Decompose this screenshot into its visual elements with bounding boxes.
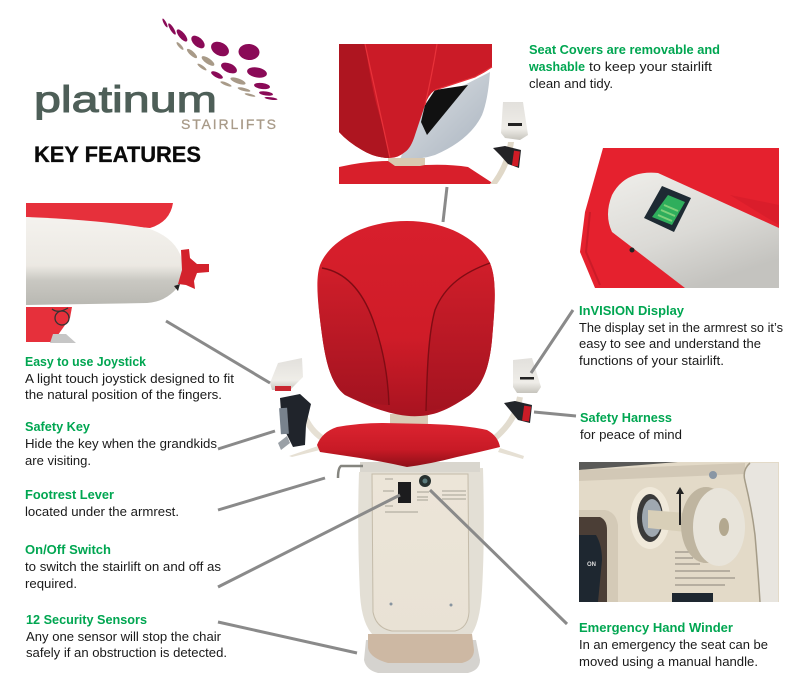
left armrest	[270, 358, 322, 457]
text: safety harness: for peace of mind	[580, 427, 682, 442]
right armrest	[495, 358, 541, 459]
text: on/off switch: to switch the stairlift on and off as	[25, 559, 221, 574]
text: footrest lever: located under the armrest.	[25, 504, 179, 519]
text: InVISION display: InVISION Display	[579, 303, 685, 318]
text: InVISION display: easy to see and understand the	[579, 336, 761, 351]
text: on/off switch: required.	[25, 576, 77, 591]
text: InVISION display: The display set in the armrest so it’s	[579, 320, 783, 335]
hand winder socket	[419, 475, 431, 487]
logo: Platinum Stairlifts	[34, 18, 278, 132]
text: joystick: the natural position of the fingers.	[25, 387, 222, 402]
text: seat covers	[528, 42, 720, 91]
logo subtitle: STAIRLIFTS	[181, 116, 276, 132]
text: safety key: Safety Key	[25, 419, 91, 434]
key ring	[52, 308, 69, 325]
text: safety harness: Safety Harness	[580, 410, 672, 425]
pointer: seat covers	[443, 187, 447, 222]
pointer: security sensors	[218, 622, 357, 653]
pointer: display	[531, 310, 573, 373]
title: KEY FEATURES	[34, 142, 201, 167]
pointer: hand winder	[430, 490, 567, 624]
logo wordmark: platinum	[34, 79, 217, 120]
text: emergency hand winder: In an emergency the seat can be	[579, 637, 768, 652]
text: safety key: are visiting.	[25, 453, 91, 468]
photo: emergency hand winder: ON	[587, 562, 596, 568]
pointer: harness	[534, 412, 576, 416]
text: joystick: A light touch joystick designed to fit	[25, 371, 234, 386]
text: security sensors: safely if an obstruction is detected.	[26, 645, 227, 660]
text: seat covers: clean and tidy.	[529, 76, 613, 91]
on/off switch	[398, 482, 411, 503]
text: footrest lever	[25, 487, 179, 519]
text: emergency hand winder: moved using a manual handle.	[579, 654, 758, 669]
text: emergency hand winder	[579, 620, 768, 669]
text: InVISION display: functions of your stairlift.	[579, 353, 724, 368]
text: on/off switch: On/Off Switch	[25, 542, 111, 557]
photo: joystick	[26, 203, 209, 343]
footrest lever	[338, 466, 363, 478]
photo: InVISION display	[580, 148, 779, 288]
text: safety key	[25, 419, 217, 468]
logo dots	[162, 18, 278, 101]
pointer: joystick	[166, 321, 270, 383]
text: footrest lever: Footrest Lever	[25, 487, 114, 502]
harness and key	[280, 394, 311, 447]
text: emergency hand winder: Emergency Hand Winder	[579, 620, 733, 635]
text: seat covers: Seat Covers are removable and	[529, 42, 720, 57]
pointer lines	[166, 187, 576, 653]
photo: seat covers	[339, 44, 528, 184]
pointer: safety key	[218, 431, 275, 449]
text: safety key: Hide the key when the grandkids	[25, 436, 217, 451]
seat cushion	[317, 423, 500, 467]
text: security sensors	[26, 612, 227, 660]
text: joystick: Easy to use Joystick	[25, 354, 147, 369]
text: seat covers: to keep your stairlift	[589, 59, 712, 74]
photo: emergency hand winder	[579, 462, 779, 602]
joystick knob	[178, 249, 209, 289]
text: seat covers: washable	[528, 59, 585, 74]
seat post	[390, 414, 428, 428]
footplate	[364, 634, 480, 673]
text: security sensors: 12 Security Sensors	[26, 612, 147, 627]
pointer: footrest	[218, 478, 325, 510]
text: on/off switch	[25, 542, 221, 591]
text: security sensors: Any one sensor will stop the chair	[26, 629, 222, 644]
text: InVISION display	[579, 303, 783, 368]
pointer: on/off switch	[218, 495, 400, 587]
stairlift chair	[270, 221, 541, 673]
backrest	[317, 221, 495, 416]
text: safety harness	[580, 410, 682, 442]
text: joystick	[25, 354, 234, 402]
base unit	[338, 462, 484, 673]
